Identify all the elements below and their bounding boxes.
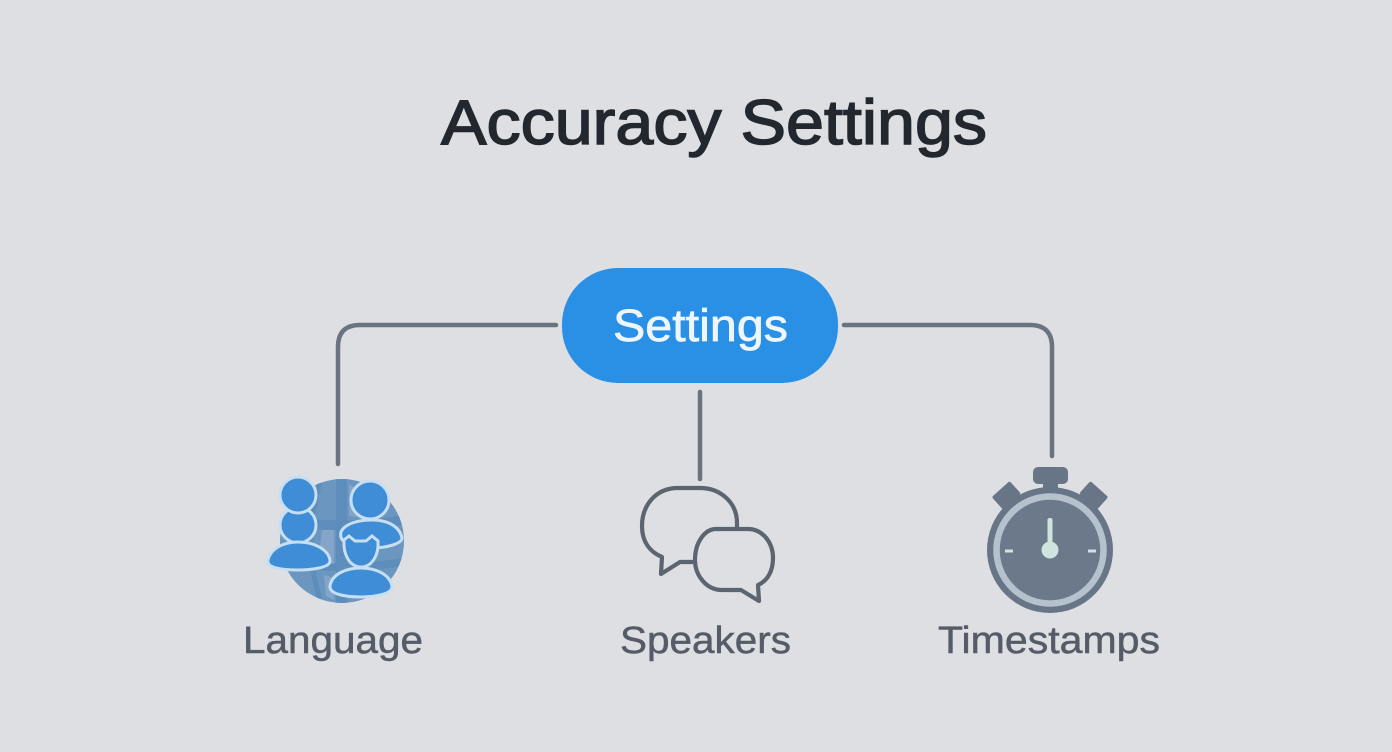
central node: settings (562, 268, 838, 383)
icon: stopwatch (987, 467, 1113, 613)
connector: settings to timestamps (844, 325, 1052, 456)
icon: speech bubbles (642, 488, 773, 601)
connector: settings to speakers (698, 392, 702, 479)
icon: language globe with people (268, 477, 404, 603)
label: language: Language (243, 620, 423, 662)
connector: settings to language (338, 325, 556, 464)
central node: settings: Settings (613, 300, 788, 351)
title: Accuracy Settings (441, 88, 987, 158)
label: timestamps: Timestamps (938, 620, 1160, 662)
label: speakers: Speakers (620, 620, 791, 662)
